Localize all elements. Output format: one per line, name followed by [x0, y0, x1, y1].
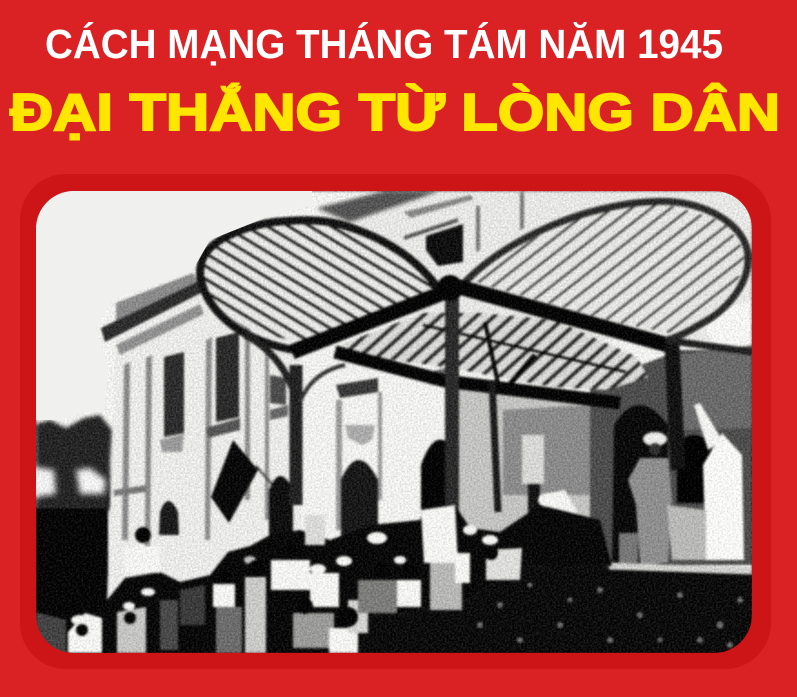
photo frame — [20, 174, 771, 669]
left canopy petal — [200, 220, 441, 350]
trees at left — [30, 415, 112, 658]
photo: crowd at the Hanoi Opera House — [30, 191, 752, 658]
heads — [76, 527, 498, 636]
ornaments — [336, 378, 378, 398]
arched doors — [341, 460, 378, 540]
right entrance wall — [455, 300, 752, 565]
pilasters — [122, 355, 152, 548]
standing people at top right — [522, 403, 744, 565]
hats — [367, 532, 387, 544]
title: yellow line: ĐẠI THẮNG TỪ LÒNG DÂN — [10, 83, 780, 142]
upper building behind canopy — [317, 191, 752, 340]
white shirts — [124, 545, 160, 573]
crowd — [66, 493, 612, 653]
flag — [211, 440, 258, 523]
windows — [164, 352, 184, 437]
hedge and steps — [358, 566, 752, 653]
smooth sky overlay — [36, 191, 312, 420]
canopy beams and columns — [245, 285, 752, 525]
canopy lower glass — [335, 313, 648, 390]
sky — [36, 191, 752, 653]
main facade — [101, 273, 450, 600]
cornice — [114, 272, 198, 322]
title: white line: CÁCH MẠNG THÁNG TÁM NĂM 1945 — [45, 21, 723, 67]
right canopy petal — [458, 201, 748, 340]
